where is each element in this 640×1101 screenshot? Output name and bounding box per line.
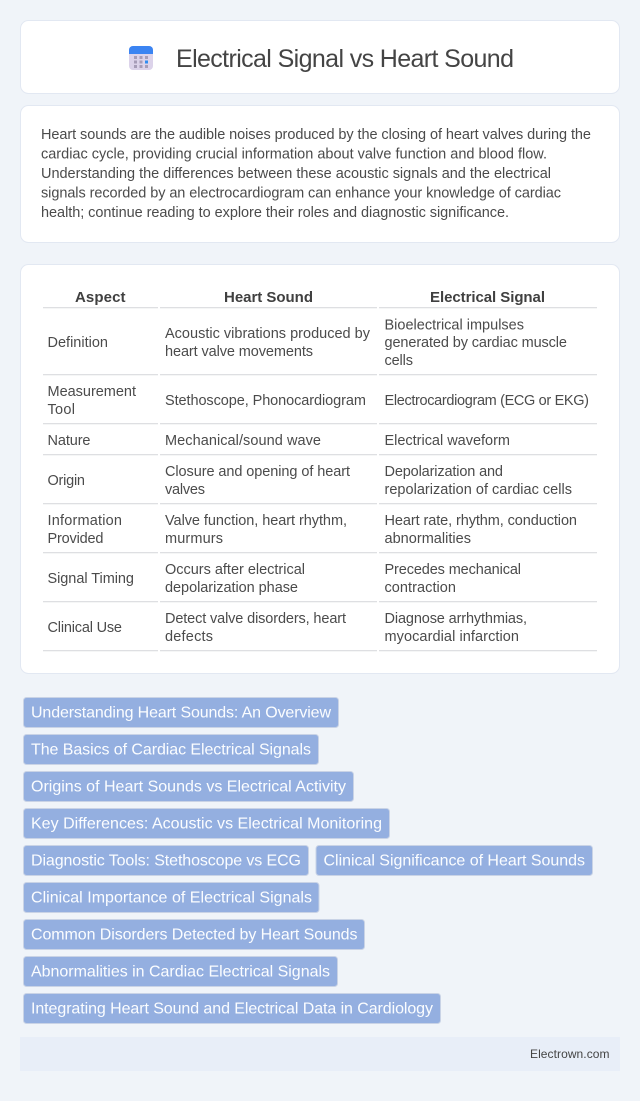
tag: Abnormalities in Cardiac Electrical Signals (31, 964, 330, 980)
row: clinical use: defects (165, 629, 213, 645)
row: clinical use: Clinical Use (48, 620, 122, 636)
row: definition: generated by cardiac muscle (384, 335, 567, 351)
row: nature (48, 433, 510, 449)
row: measurement tool: Measurement (48, 384, 136, 400)
intro paragraph: health; continue reading to explore their roles and diagnostic significance. (41, 205, 509, 221)
panel: introduction (20, 106, 620, 242)
row: signal timing: depolarization phase (165, 580, 298, 596)
row: definition: Definition (48, 335, 108, 351)
tag: Clinical Importance of Electrical Signals (31, 890, 312, 906)
intro paragraph (41, 127, 591, 221)
row: definition (48, 318, 567, 369)
row: origin: repolarization of cardiac cells (384, 482, 572, 498)
row: origin: Depolarization and (384, 464, 503, 480)
tag (24, 882, 319, 912)
panel: comparison table (20, 264, 620, 674)
row: clinical use: Detect valve disorders, heart (165, 611, 346, 627)
row: clinical use: myocardial infarction (384, 629, 519, 645)
row: measurement tool: Electrocardiogram (ECG or EKG) (384, 393, 589, 409)
row: signal timing: Signal Timing (48, 571, 134, 587)
row: signal timing: Occurs after electrical (165, 562, 305, 578)
row: signal timing: contraction (384, 580, 456, 596)
row: definition: heart valve movements (165, 344, 313, 360)
row: signal timing: Precedes mechanical (384, 562, 521, 578)
row: signal timing (48, 562, 521, 596)
topic tags (24, 698, 592, 1024)
row: measurement tool (48, 384, 589, 418)
row: information provided: Information (48, 513, 122, 529)
row: information provided: Heart rate, rhythm, conduction (384, 513, 577, 529)
title: Electrical Signal vs Heart Sound (176, 45, 514, 73)
intro paragraph: cardiac cycle, providing crucial information about valve function and blood flow. (41, 146, 547, 162)
tag: Common Disorders Detected by Heart Sounds (31, 926, 358, 944)
row: origin: Closure and opening of heart (165, 464, 350, 480)
tag: The Basics of Cardiac Electrical Signals (31, 742, 311, 758)
row: definition: Acoustic vibrations produced by (165, 326, 371, 342)
footer (20, 1037, 620, 1071)
row: origin: valves (165, 482, 205, 498)
tag (24, 920, 364, 950)
table header row (75, 289, 545, 306)
intro paragraph: signals recorded by an electrocardiogram can enhance your knowledge of cardiac (41, 186, 561, 202)
tag (24, 994, 440, 1024)
row: measurement tool: Tool (48, 402, 75, 418)
tag (24, 808, 390, 838)
tag (24, 956, 338, 986)
row: measurement tool: Stethoscope, Phonocardiogram (165, 393, 366, 409)
tag (24, 698, 338, 728)
icon: calendar (129, 46, 153, 70)
row: information provided: murmurs (165, 531, 223, 547)
row: clinical use: Diagnose arrhythmias, (384, 611, 527, 627)
row: information provided (48, 513, 577, 547)
row: information provided: Valve function, heart rhythm, (165, 513, 347, 529)
footer: Electrown.com (530, 1047, 610, 1061)
tag (24, 734, 318, 764)
row: nature: Mechanical/sound wave (165, 433, 321, 449)
header panel (20, 20, 620, 94)
row: origin (48, 464, 572, 498)
tag (316, 846, 592, 876)
row: nature: Nature (48, 433, 90, 449)
intro paragraph: Understanding the differences between these acoustic signals and the electrical (41, 166, 551, 182)
row: definition: Bioelectrical impulses (384, 318, 524, 334)
table header row: Aspect (75, 289, 126, 306)
tag: Diagnostic Tools: Stethoscope vs ECG (31, 852, 301, 870)
row: clinical use (48, 611, 527, 645)
tag (24, 846, 308, 876)
row: origin: Origin (48, 473, 85, 489)
row: information provided: abnormalities (384, 531, 471, 547)
intro paragraph: Heart sounds are the audible noises produced by the closing of heart valves during the (41, 127, 591, 143)
tag: Clinical Significance of Heart Sounds (324, 852, 585, 870)
tag: Origins of Heart Sounds vs Electrical Activity (31, 778, 346, 796)
row: information provided: Provided (48, 531, 104, 547)
row: nature: Electrical waveform (384, 433, 510, 449)
table header row: Electrical Signal (430, 289, 545, 306)
tag: Integrating Heart Sound and Electrical Data in Cardiology (31, 1000, 433, 1018)
table header row: Heart Sound (224, 289, 313, 306)
tag (24, 772, 354, 802)
row: definition: cells (384, 353, 413, 369)
tag: Key Differences: Acoustic vs Electrical Monitoring (31, 816, 382, 832)
tag: Understanding Heart Sounds: An Overview (31, 704, 331, 722)
